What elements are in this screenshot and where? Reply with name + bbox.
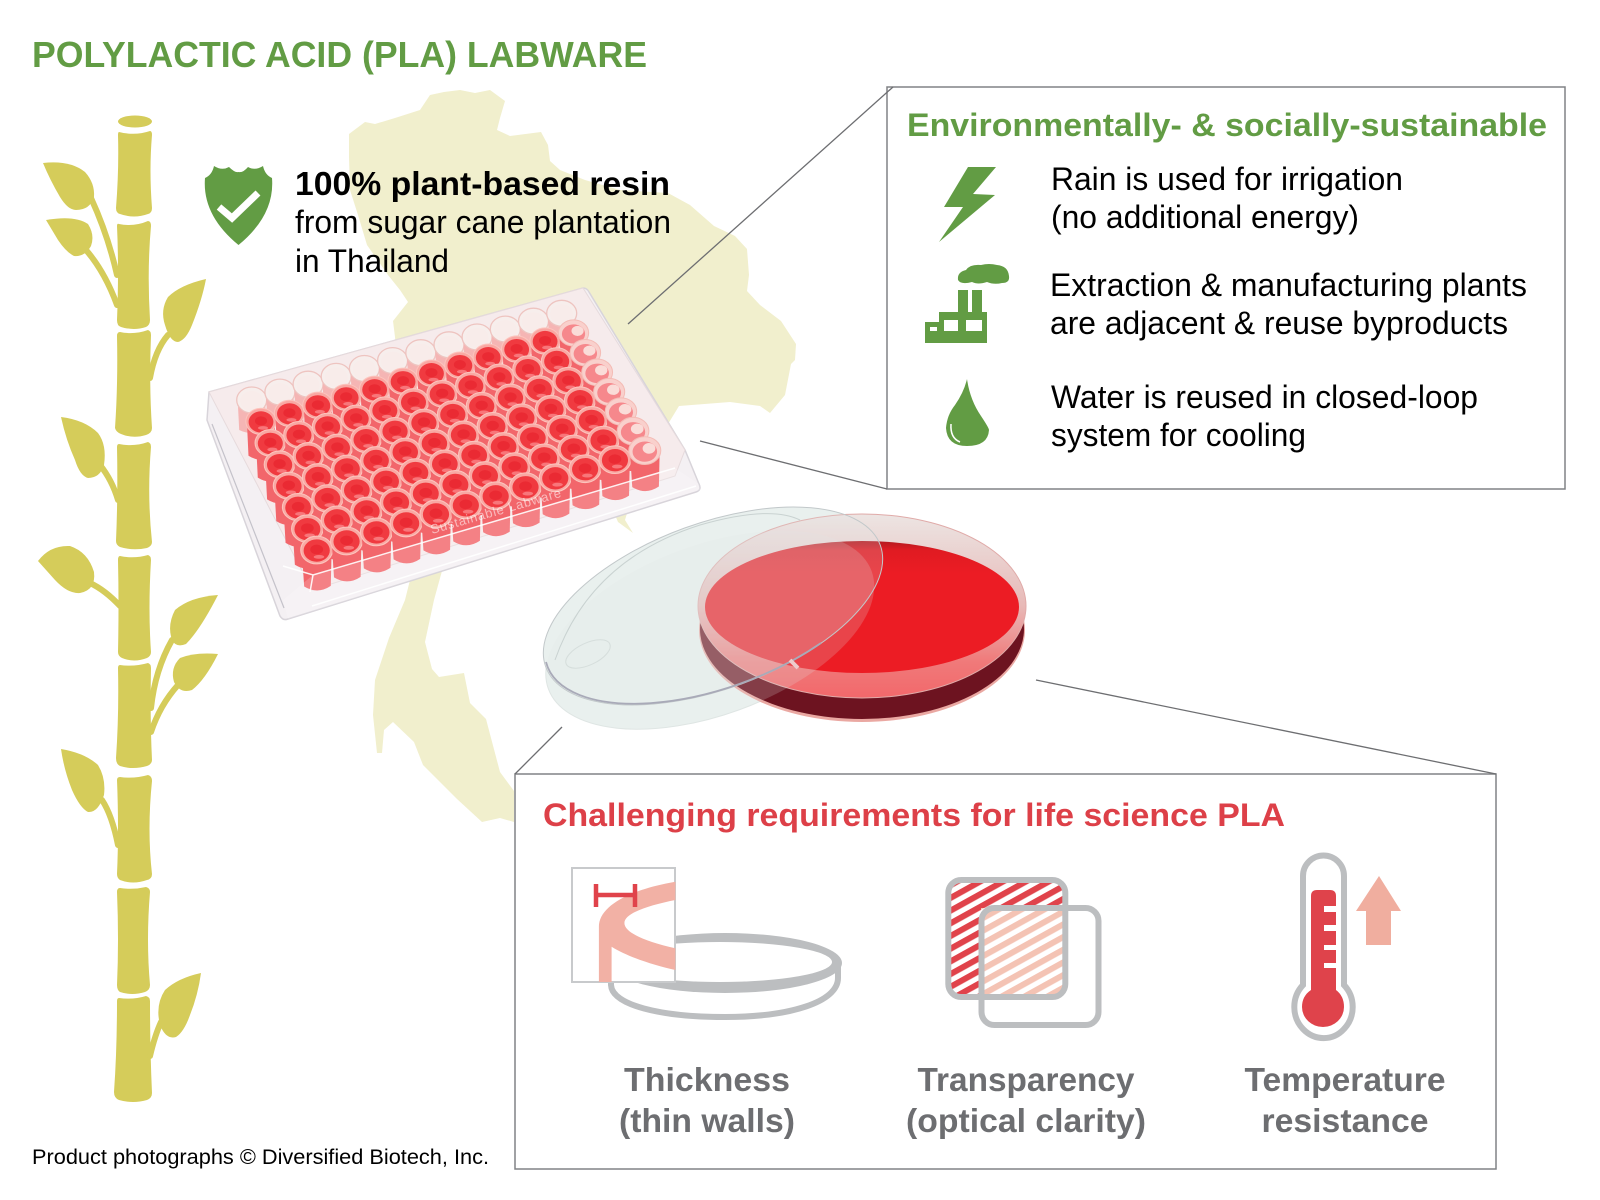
- bamboo stalk illustration: [38, 116, 218, 1102]
- label: thickness: (thin walls): [619, 1102, 795, 1139]
- label: temperature: [1244, 1061, 1446, 1139]
- text: water: [1051, 379, 1478, 453]
- icon: green shield with check: [205, 166, 272, 245]
- petri dish photo: [517, 467, 1026, 769]
- lid base behind dish: [517, 467, 909, 769]
- text: plant-based resin: [295, 165, 671, 279]
- embossed plate label: Sustainable Labware: [429, 485, 563, 537]
- text: rain: (no additional energy): [1051, 199, 1359, 235]
- icon: thermometer: [1294, 855, 1353, 1038]
- icon: temperature up arrow: [1356, 876, 1401, 945]
- bamboo stalk segments: [114, 116, 152, 1102]
- plate lid top: [209, 288, 685, 590]
- label: temperature: Temperature: [1244, 1061, 1446, 1098]
- label: transparency: Transparency: [918, 1061, 1135, 1098]
- text: plant-based resin: in Thailand: [295, 243, 449, 279]
- icon: water drop: [946, 379, 989, 446]
- label: thickness: [619, 1061, 795, 1139]
- heading: requirements: Challenging requirements for life science PLA: [543, 797, 1285, 833]
- plate front wall overlay: [283, 468, 700, 619]
- text: plant-based resin: 100% plant-based resin: [295, 165, 670, 202]
- leader line: plate to sustainability box bottom: [700, 441, 887, 489]
- map of Thailand: [349, 90, 796, 822]
- icon: dish wall thickness: [572, 868, 842, 1017]
- panel: requirements: [515, 774, 1496, 1169]
- leader line: dish to requirements box left: [515, 727, 562, 774]
- dish lid overlay: [517, 467, 909, 769]
- panel: sustainability: [887, 87, 1565, 489]
- dish base: [698, 514, 1026, 722]
- plate skirt: [207, 288, 700, 620]
- title: POLYLACTIC ACID (PLA) LABWARE: [32, 34, 647, 75]
- label: thickness: Thickness: [624, 1061, 790, 1098]
- icon: lightning bolt: [939, 167, 996, 242]
- icon: factory with smoke: [925, 264, 1009, 343]
- text: rain: Rain is used for irrigation: [1051, 161, 1403, 197]
- 96-well microplate photo: [207, 288, 700, 620]
- label: temperature: resistance: [1262, 1102, 1428, 1139]
- plate front edge lines: [283, 468, 696, 606]
- label: transparency: [906, 1061, 1146, 1139]
- label: transparency: (optical clarity): [906, 1102, 1146, 1139]
- leader line: dish to requirements box right: [1036, 680, 1496, 774]
- text: water: system for cooling: [1051, 417, 1306, 453]
- bamboo leaf stems: [86, 198, 178, 1056]
- text: extraction: are adjacent & reuse byproducts: [1050, 305, 1508, 341]
- footer credit: Product photographs © Diversified Biotech, Inc.: [32, 1146, 489, 1169]
- leader line: plate to sustainability box top: [628, 87, 893, 324]
- text: rain: [1051, 161, 1403, 235]
- text: extraction: Extraction & manufacturing plants: [1050, 267, 1527, 303]
- text: water: Water is reused in closed-loop: [1051, 379, 1478, 415]
- icon: transparency squares: [948, 880, 1098, 1025]
- plate left skirt line: [212, 424, 284, 608]
- lid rim highlight: [546, 643, 821, 704]
- well rows: [237, 300, 664, 591]
- bamboo leaves: [38, 162, 218, 1037]
- heading: sustainability: Environmentally- & socially-sustainable: [907, 107, 1547, 143]
- text: extraction: [1050, 267, 1527, 341]
- text: plant-based resin: from sugar cane plantation: [295, 204, 671, 240]
